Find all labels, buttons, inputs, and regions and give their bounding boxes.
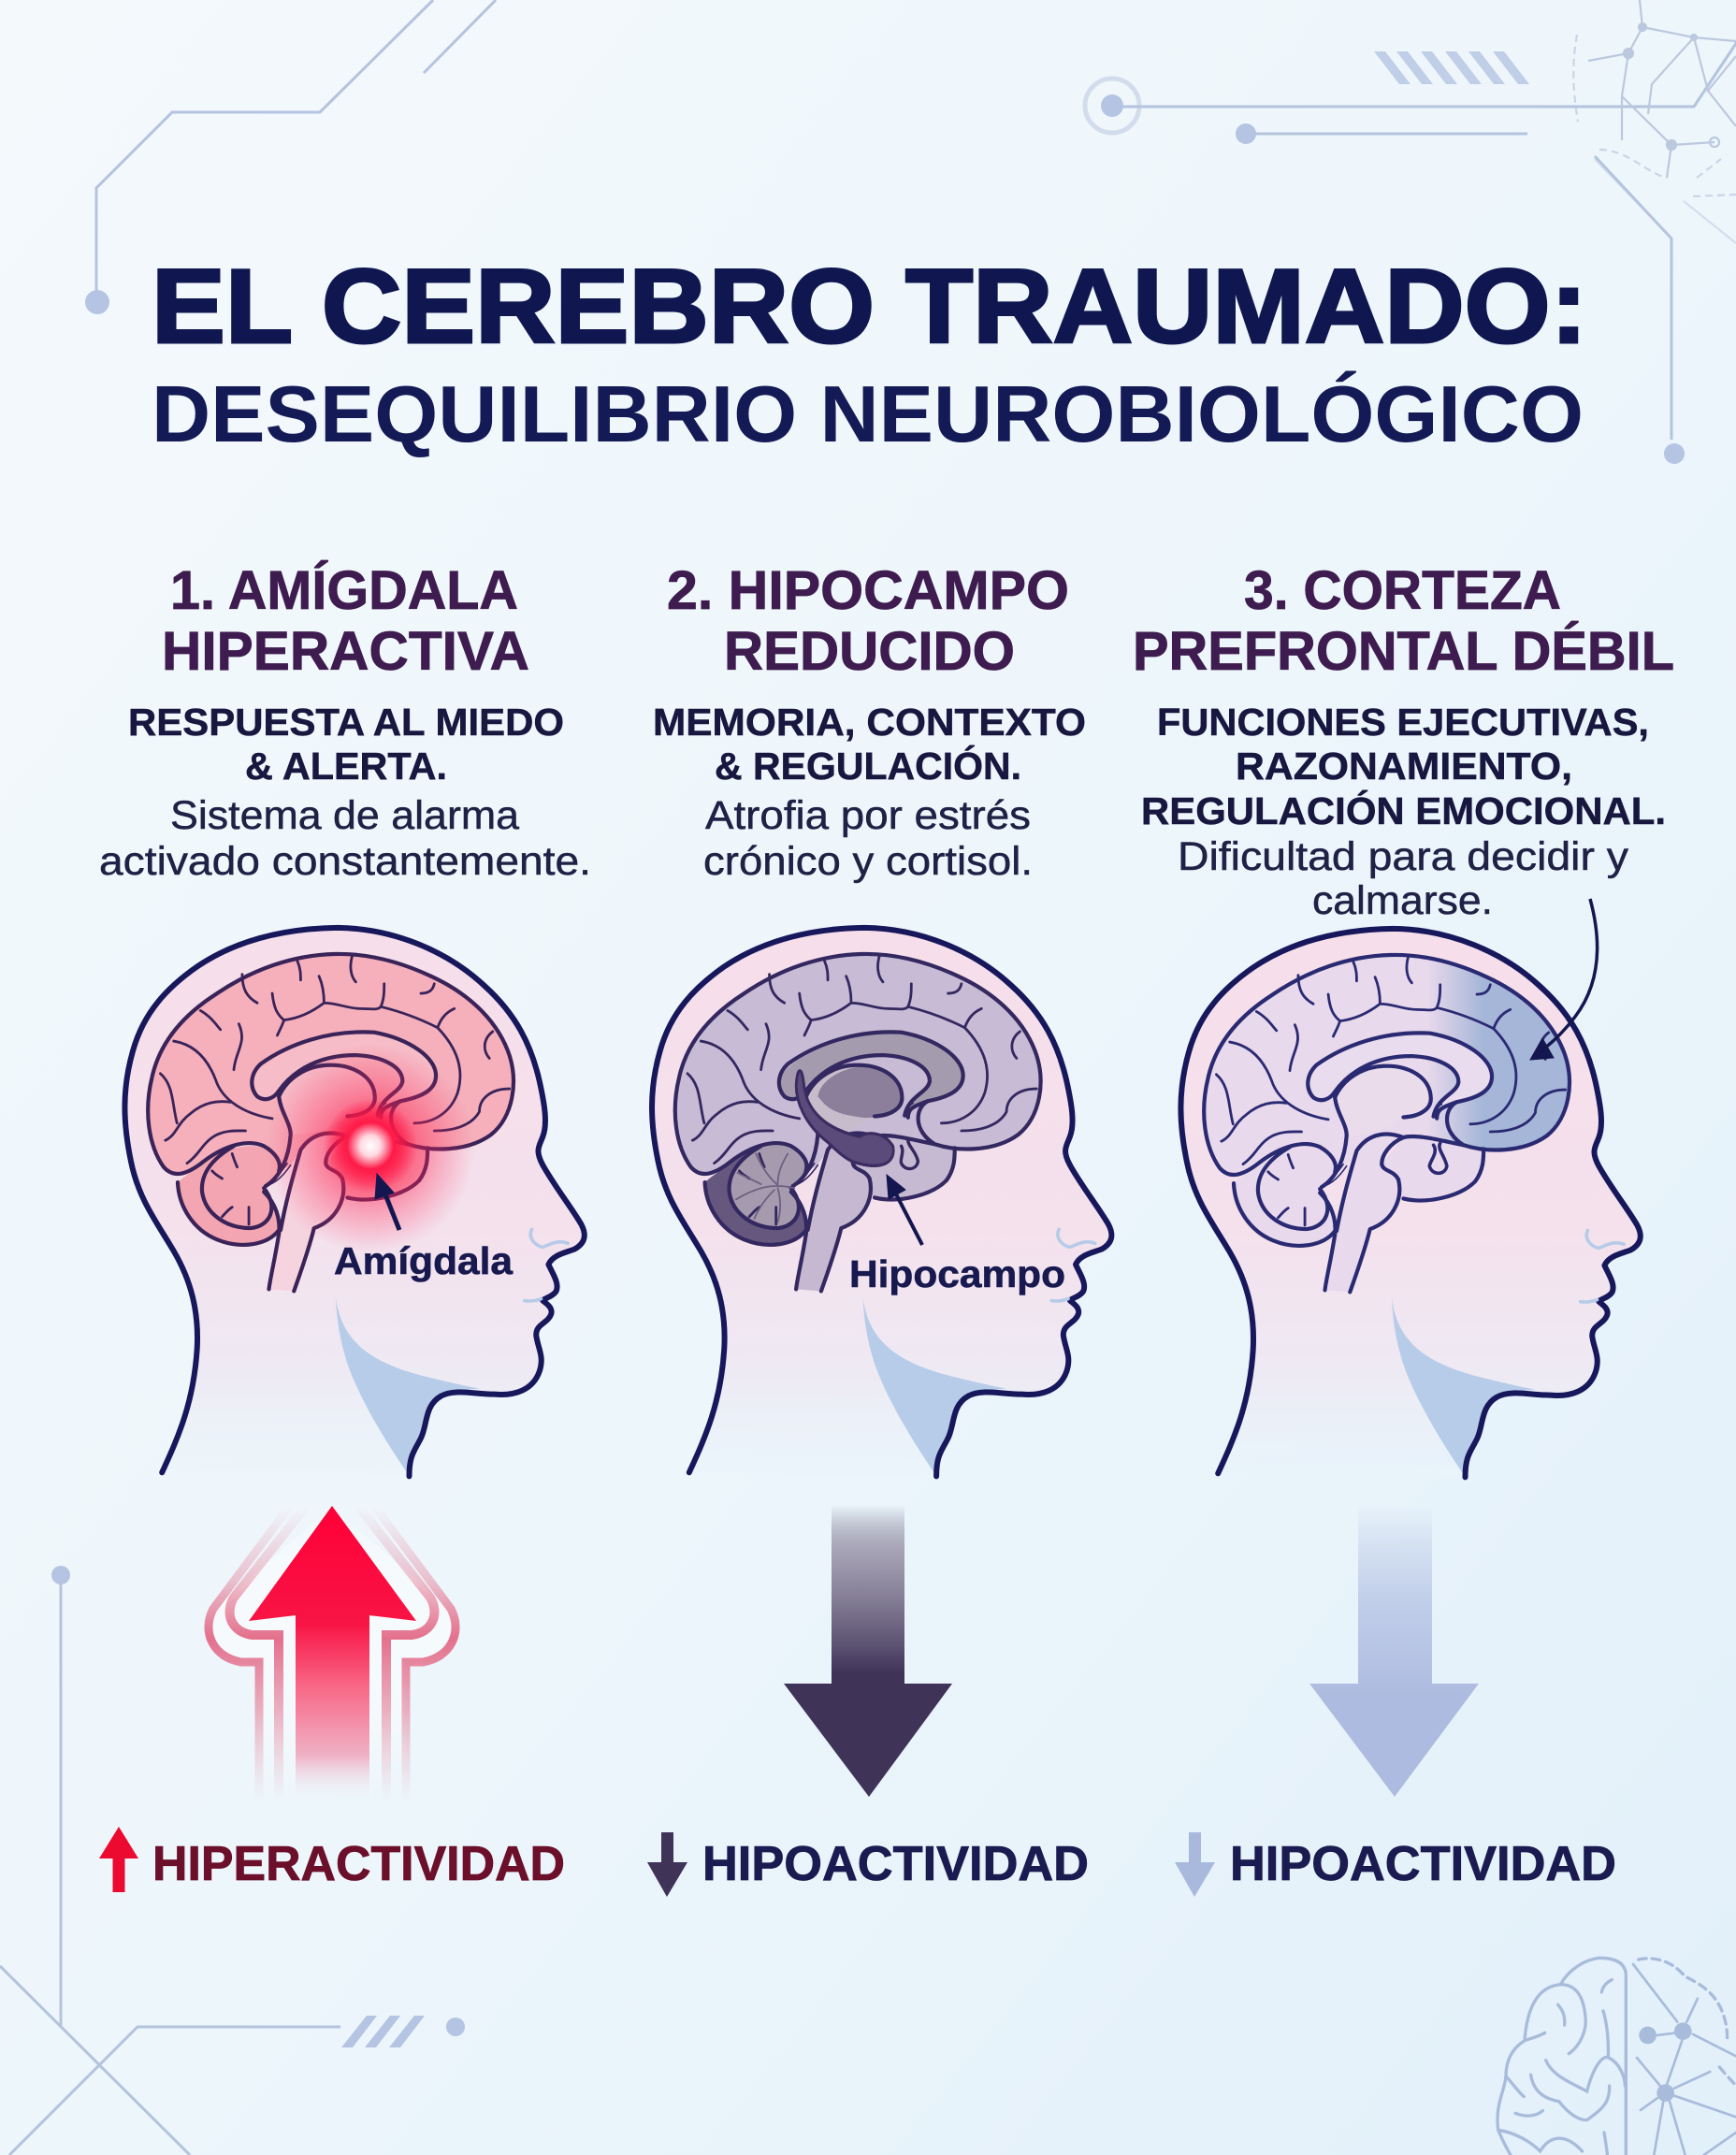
title xyxy=(152,248,1587,459)
column 1 description: & ALERTA. xyxy=(245,745,447,788)
column 2 heading: 2. HIPOCAMPO xyxy=(667,560,1069,621)
head 3: prefrontal cortex xyxy=(1180,899,1641,1477)
column 1 description: activado constantemente. xyxy=(99,839,591,884)
column 2 heading: REDUCIDO xyxy=(724,621,1015,682)
column 2 description xyxy=(653,701,1086,884)
column 3 description: FUNCIONES EJECUTIVAS, xyxy=(1157,701,1649,744)
big arrow: hypoactivity hippocampus xyxy=(784,1505,952,1797)
column 3 heading: PREFRONTAL DÉBIL xyxy=(1133,621,1674,682)
column 1 description: RESPUESTA AL MIEDO xyxy=(128,701,564,744)
column 3 description: RAZONAMIENTO, xyxy=(1236,745,1572,788)
big arrow: hypoactivity cortex xyxy=(1309,1505,1479,1797)
column 2 description: Atrofia por estrés xyxy=(705,793,1031,838)
title: DESEQUILIBRIO NEUROBIOLÓGICO xyxy=(152,370,1584,459)
column 2 description: MEMORIA, CONTEXTO xyxy=(653,701,1086,744)
column 2 heading xyxy=(667,560,1069,682)
column 2 description: & REGULACIÓN. xyxy=(715,745,1021,788)
status: hipoactividad hippocampus: HIPOACTIVIDAD xyxy=(702,1837,1089,1891)
column 1 description: Sistema de alarma xyxy=(170,793,519,838)
decoration: bottom-left circuit lines xyxy=(0,1566,465,2155)
column 3 description: calmarse. xyxy=(1312,878,1493,923)
arrow: amygdala pointer xyxy=(375,1174,399,1230)
column 3 description: Dificultad para decidir y xyxy=(1178,834,1629,879)
column 1 heading xyxy=(162,560,529,682)
arrow: hippocampus pointer xyxy=(887,1175,922,1245)
column 1 heading: HIPERACTIVA xyxy=(162,621,529,682)
column 3 heading: 3. CORTEZA xyxy=(1244,560,1561,621)
status: hipoactividad cortex: HIPOACTIVIDAD xyxy=(1230,1837,1616,1891)
column 2 description: crónico y cortisol. xyxy=(703,839,1033,884)
head 1: amygdala xyxy=(124,928,585,1476)
decoration: top-left circuit lines xyxy=(85,0,496,314)
label: amígdala: Amígdala xyxy=(334,1239,514,1282)
big arrow: hyperactivity xyxy=(209,1497,456,1801)
arrow: prefrontal pointer xyxy=(1530,899,1598,1060)
column 3 description: REGULACIÓN EMOCIONAL. xyxy=(1141,789,1666,832)
column 1 heading: 1. AMÍGDALA xyxy=(170,560,518,621)
head 2: hippocampus xyxy=(652,928,1111,1476)
label: hipocampo: Hipocampo xyxy=(849,1252,1065,1295)
column 3 description xyxy=(1141,701,1666,923)
column 3 heading xyxy=(1133,560,1674,682)
title: EL CEREBRO TRAUMADO: xyxy=(152,248,1587,365)
decoration: top-right circuit lines xyxy=(1085,42,1736,464)
hippocampus xyxy=(796,1071,893,1165)
decoration: bottom-right brain and network xyxy=(1497,1958,1736,2155)
status: hyperactividad: HIPERACTIVIDAD xyxy=(152,1837,565,1891)
cerebellum branches xyxy=(736,1153,794,1222)
decoration: top-right neural network xyxy=(1573,0,1736,243)
column 1 description xyxy=(99,701,591,884)
glow: amygdala xyxy=(266,1044,475,1253)
